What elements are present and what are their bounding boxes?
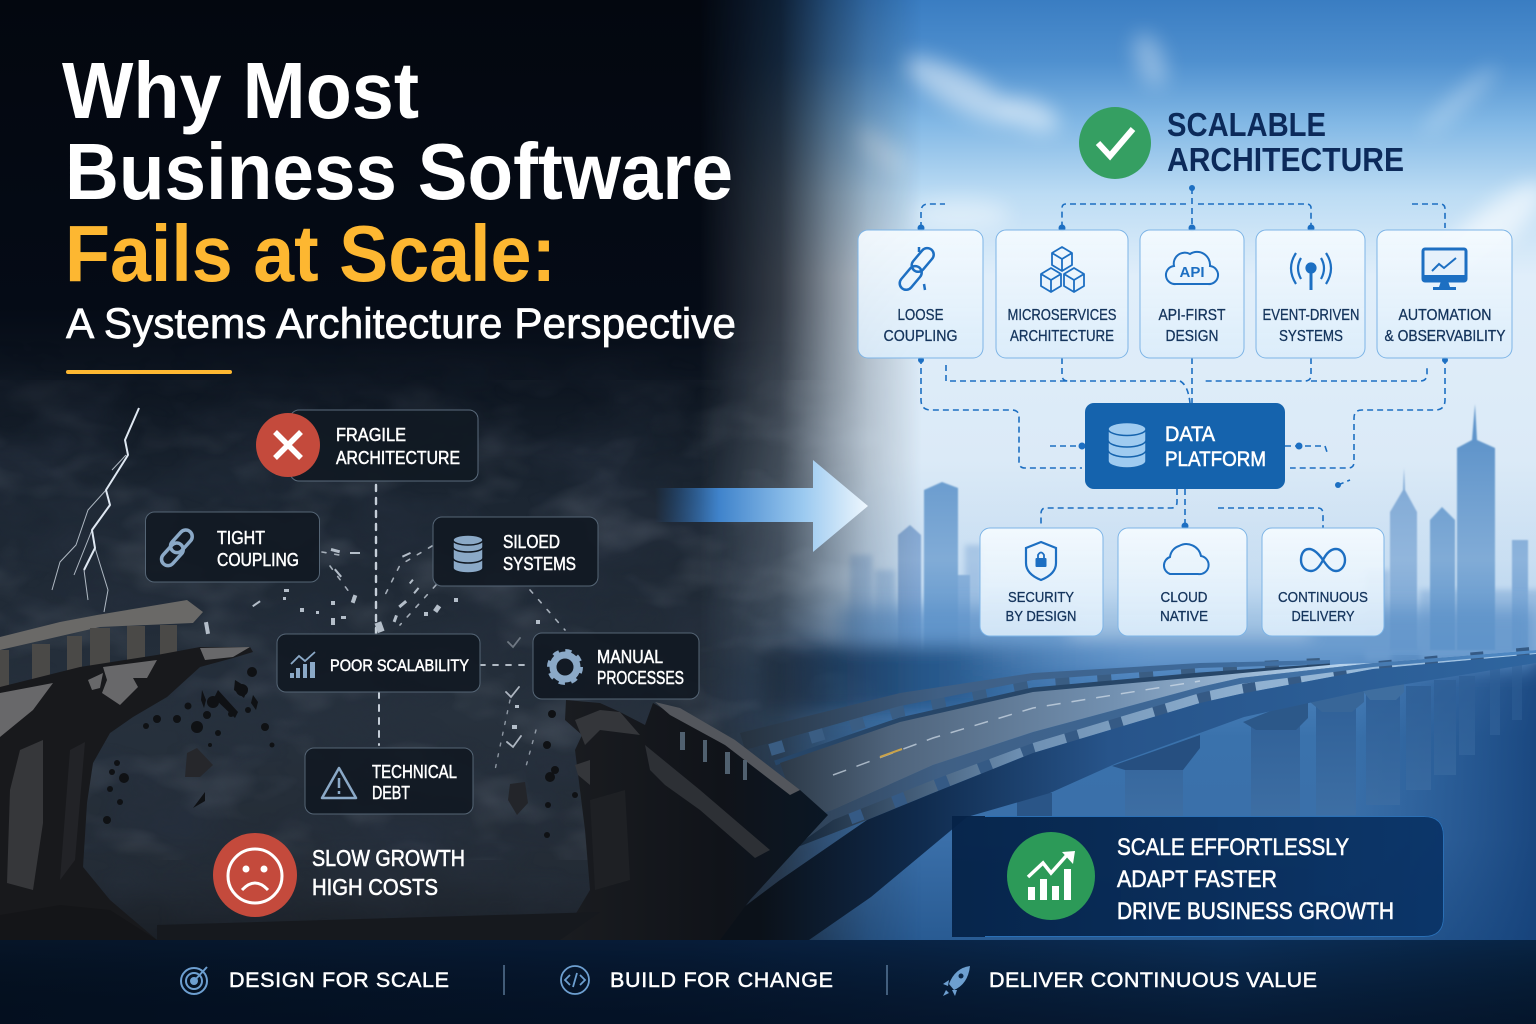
card: manual processes (533, 633, 699, 699)
icon: infinity (1301, 549, 1345, 571)
panel: benefits: ADAPT FASTER (1117, 866, 1277, 893)
icon: monitor (1423, 249, 1466, 290)
connector lines (918, 185, 1448, 530)
footer band (0, 940, 1536, 1024)
lightning bolt (52, 408, 139, 612)
card: fragile architecture (256, 410, 478, 481)
outcome: slow growth (213, 833, 465, 917)
title underline (66, 370, 232, 374)
card: continuous delivery: DELIVERY (1292, 608, 1354, 625)
icon: gear (550, 652, 580, 682)
card: event-driven systems: EVENT-DRIVEN (1262, 307, 1360, 324)
subtitle: A Systems Architecture Perspective (66, 300, 736, 348)
icon: antenna (1291, 253, 1331, 290)
title: Why Most (62, 46, 419, 135)
card: microservices architecture (996, 230, 1128, 358)
card: technical debt: TECHNICAL (372, 762, 457, 782)
distant buildings (850, 545, 1536, 660)
ruined railing (655, 702, 800, 795)
card: loose coupling (858, 230, 983, 358)
road markings (833, 681, 1200, 775)
panel: benefits (952, 816, 1444, 937)
panel: benefits: SCALE EFFORTLESSLY (1117, 834, 1349, 861)
near railing gaps (790, 650, 1536, 850)
heading: scalable architecture: ARCHITECTURE (1167, 141, 1404, 178)
far curb (775, 666, 1330, 763)
falling debris (103, 667, 578, 838)
card: api-first design: DESIGN (1166, 328, 1218, 345)
title (62, 46, 733, 298)
main towers (898, 404, 1528, 650)
panel: benefits: DRIVE BUSINESS GROWTH (1117, 898, 1394, 925)
right broken pier and ruined deck (157, 700, 828, 940)
card: data platform: DATA (1165, 422, 1216, 446)
card: cloud native (1118, 528, 1247, 636)
icon: cloud (1164, 544, 1209, 574)
outcome: slow growth: SLOW GROWTH (312, 845, 465, 871)
card: security by design: SECURITY (1008, 589, 1074, 606)
card: manual processes: PROCESSES (597, 668, 684, 688)
card: event-driven systems (1256, 230, 1365, 358)
icon: api cloud: API (1179, 264, 1205, 281)
card: cloud native: CLOUD (1160, 589, 1208, 606)
card: tight coupling: COUPLING (217, 549, 299, 570)
card: technical debt: DEBT (372, 783, 410, 803)
card: loose coupling: COUPLING (884, 328, 958, 345)
card: siloed systems (433, 517, 598, 586)
card: continuous delivery: CONTINUOUS (1278, 589, 1368, 606)
card: poor scalability: POOR SCALABILITY (330, 657, 469, 675)
glass shards (204, 548, 540, 729)
far railing posts (770, 664, 1320, 750)
icon: green check (1079, 107, 1151, 179)
card: automation and observability: AUTOMATION (1398, 307, 1492, 324)
card: tight coupling (146, 512, 320, 582)
card: cloud native: NATIVE (1160, 608, 1208, 625)
icon: database (453, 535, 483, 573)
icon: broken chain (897, 245, 936, 292)
far railing beam (740, 660, 1330, 750)
outcome: slow growth: HIGH COSTS (312, 874, 438, 900)
near railing beam (790, 650, 1536, 850)
icon: database (1108, 422, 1146, 468)
ruined deck face (645, 745, 770, 858)
card: security by design (980, 528, 1103, 636)
icon: warning triangle (322, 768, 356, 798)
card: manual processes: MANUAL (597, 647, 663, 667)
fascia (700, 654, 1536, 940)
card: api-first design (1140, 230, 1244, 358)
card: continuous delivery (1262, 528, 1384, 636)
card: microservices architecture: ARCHITECTURE (1010, 328, 1114, 345)
heading: scalable architecture: SCALABLE (1167, 106, 1326, 143)
background: dark storm side (0, 0, 913, 940)
footer item: build for change: BUILD FOR CHANGE (610, 968, 833, 992)
card: siloed systems: SYSTEMS (503, 553, 576, 574)
road deck (780, 663, 1373, 820)
left broken bridge (0, 600, 253, 940)
ground (157, 912, 600, 940)
title: Business Software (65, 127, 733, 216)
card: fragile architecture: ARCHITECTURE (336, 447, 460, 468)
card: security by design: BY DESIGN (1006, 608, 1076, 625)
card: event-driven systems: SYSTEMS (1279, 328, 1343, 345)
card: data platform (1085, 403, 1285, 489)
right bridge (700, 650, 1536, 940)
card: technical debt (305, 748, 473, 814)
card: microservices architecture: MICROSERVICES (1008, 307, 1116, 324)
card: automation and observability: & OBSERVABILITY (1384, 328, 1506, 345)
card: api-first design: API-FIRST (1158, 307, 1226, 324)
icon: chain link (159, 527, 195, 568)
stone arch (0, 647, 253, 940)
footer item: deliver continuous value: DELIVER CONTINUOUS VALUE (989, 968, 1317, 992)
card: data platform: PLATFORM (1165, 447, 1266, 471)
footer item: design for scale: DESIGN FOR SCALE (229, 968, 449, 992)
arrow: transition to scalable (655, 460, 868, 552)
skyline (760, 404, 1536, 710)
card: fragile architecture: FRAGILE (336, 424, 406, 445)
top rail (0, 600, 203, 650)
card: poor scalability (277, 634, 480, 692)
icon: red x (256, 413, 320, 477)
city base haze (760, 600, 1536, 710)
card: tight coupling: TIGHT (217, 527, 265, 548)
broken dashed links (322, 485, 565, 770)
icon: cubes (1041, 247, 1084, 292)
bridge piers (1017, 662, 1522, 816)
icon: bar chart (290, 652, 315, 678)
title: Fails at Scale: (65, 209, 556, 298)
icon: growth chart (1007, 832, 1095, 920)
card: loose coupling: LOOSE (898, 307, 944, 324)
near railing posts (850, 653, 1536, 818)
card: automation and observability (1377, 230, 1512, 358)
card: siloed systems: SILOED (503, 531, 560, 552)
icon: shield lock (1026, 542, 1056, 580)
heading: scalable architecture (1079, 106, 1404, 179)
icon: sad face (213, 833, 297, 917)
